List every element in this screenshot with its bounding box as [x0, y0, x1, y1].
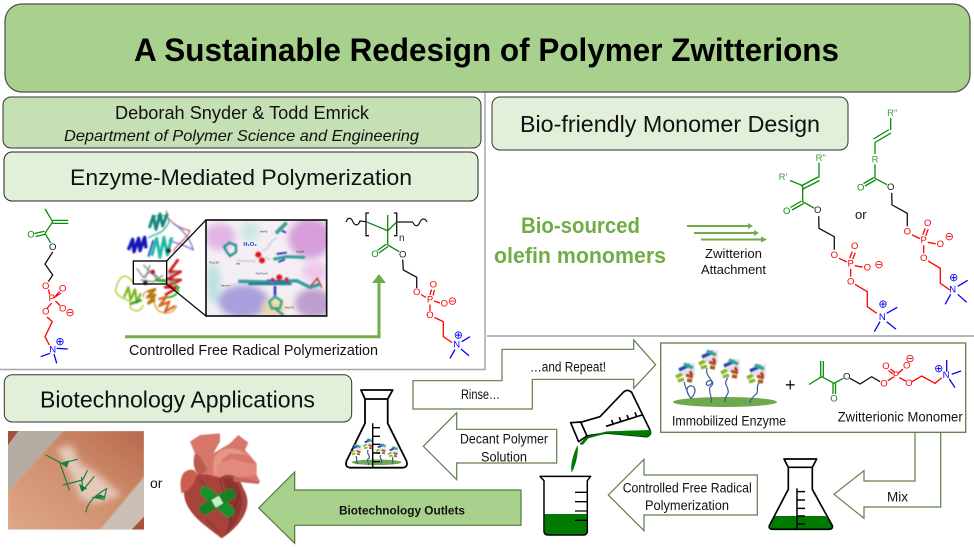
molecule: horizontal zwitterionic monomer: N: [943, 370, 950, 381]
molecule: olefin monomer two: [857, 108, 968, 304]
molecule: olefin monomer one: O: [814, 205, 821, 216]
label: or: or: [150, 475, 163, 491]
molecule: left zwitterionic monomer: [27, 209, 75, 363]
molecule: olefin monomer one: O: [783, 206, 790, 217]
molecule: olefin monomer one: O: [851, 241, 858, 252]
label: Zwitterion Attachment: Zwitterion: [705, 246, 762, 261]
molecule: poly zwitterion: O: [441, 298, 448, 310]
molecule: olefin monomer two: O: [887, 182, 894, 193]
molecule: olefin monomer one: O: [831, 250, 838, 261]
icon: peroxidase enzyme ribbon with inset active site: His42: [260, 229, 268, 233]
molecule: poly zwitterion: O: [430, 280, 437, 290]
icon: peroxidase enzyme ribbon with inset active site: wat: [236, 261, 240, 265]
molecule: poly zwitterion: n: [399, 233, 405, 244]
panel: enzyme plus monomer: [661, 343, 966, 432]
arrow: Rinse and Repeat: Rinse…: [461, 387, 500, 402]
label: Immobilized Enzyme: Immobilized Enzyme: [672, 414, 786, 429]
heading: Bio-sourced olefin monomers: Bio-sourced: [521, 213, 640, 238]
icon: heart with green bandage: [181, 433, 260, 538]
plus sign: +: [785, 375, 796, 395]
molecule: olefin monomer one: [779, 153, 897, 332]
molecule: left zwitterionic monomer: ⊖: [65, 306, 75, 319]
molecule: olefin monomer one: O: [864, 262, 871, 273]
molecule: olefin monomer one: O: [847, 276, 854, 288]
arrow: Controlled Free Radical Polymerization: Polymerization: [645, 498, 729, 513]
molecule: olefin monomer one: R': [779, 172, 788, 183]
icon: beaker with polymer solution: [540, 476, 591, 535]
molecule: olefin monomer two: O: [920, 253, 927, 264]
molecule: poly zwitterion: ⊕: [454, 328, 463, 342]
icon: peroxidase enzyme ribbon with inset active site: His170: [285, 305, 294, 309]
molecule: horizontal zwitterionic monomer: P: [893, 370, 899, 381]
molecule: poly zwitterion: O: [371, 249, 379, 260]
label: or: or: [855, 207, 867, 222]
authors box: Deborah Snyder & Todd Emrick: [115, 103, 370, 123]
arrow: Decant Polymer Solution: Solution: [481, 450, 527, 465]
authors box: Department of Polymer Science and Engineering: [64, 128, 419, 145]
icon: flask with monomer solution: [769, 459, 832, 529]
molecule: olefin monomer one: N: [879, 312, 886, 323]
molecule: poly zwitterion: O: [399, 250, 406, 260]
molecule: olefin monomer one: ⊖: [874, 258, 884, 271]
label: Zwitterionic Monomer: Zwitterionic Monomer: [838, 410, 963, 425]
molecule: olefin monomer one: ⊕: [878, 298, 888, 310]
arrow: Biotechnology Outlets: [259, 472, 521, 543]
molecule: left zwitterionic monomer: ⊕: [55, 335, 65, 348]
heading: Enzyme-Mediated Polymerization: Enzyme-Mediated Polymerization: [70, 165, 412, 190]
molecule: horizontal zwitterionic monomer: O: [905, 378, 913, 389]
icon: peroxidase enzyme ribbon with inset active site: Fe(IV)=O: [256, 272, 269, 276]
molecule: olefin monomer two: O: [857, 182, 864, 194]
molecule: horizontal zwitterionic monomer: O: [882, 361, 890, 372]
heading: Enzyme-Mediated Polymerization: [4, 152, 478, 201]
molecule: poly zwitterion: ⊖: [448, 294, 457, 308]
arrow: Rinse and Repeat: …and Repeat!: [530, 360, 606, 375]
molecule: horizontal zwitterionic monomer: [809, 352, 961, 404]
title banner: [5, 4, 970, 92]
molecule: olefin monomer two: R": [887, 108, 897, 119]
molecule: olefin monomer two: ⊖: [945, 230, 954, 243]
icon: peroxidase enzyme ribbon with inset active site: [115, 211, 332, 318]
title banner: A Sustainable Redesign of Polymer Zwitterions: [134, 32, 839, 68]
icon: peroxidase enzyme ribbon with inset active site: Arg38: [296, 249, 304, 253]
molecule: left zwitterionic monomer: P: [49, 293, 55, 304]
molecule: olefin monomer one: R": [816, 153, 826, 164]
molecule: poly zwitterion: O: [413, 287, 420, 298]
arrow: Decant Polymer Solution: [423, 413, 557, 480]
molecule: poly zwitterion: N: [453, 340, 460, 350]
molecule: left zwitterionic monomer: N: [49, 344, 56, 356]
molecule: olefin monomer two: O: [904, 226, 911, 237]
molecule: poly zwitterion: O: [426, 310, 434, 321]
arrow: Mix: Mix: [887, 490, 908, 505]
molecule: poly zwitterion: [346, 213, 470, 358]
arrow: Rinse and Repeat: [413, 340, 656, 409]
heading: Bio-friendly Monomer Design: [492, 97, 848, 150]
molecule: left zwitterionic monomer: O: [27, 230, 35, 240]
icon: flask with immobilized enzyme: [346, 390, 407, 468]
molecule: left zwitterionic monomer: O: [59, 304, 66, 314]
molecule: olefin monomer two: O: [924, 218, 931, 229]
label: Zwitterion Attachment: Attachment: [701, 262, 766, 277]
heading: Bio-friendly Monomer Design: Bio-friendly Monomer Design: [520, 111, 820, 137]
arrow: Decant Polymer Solution: Decant Polymer: [460, 432, 548, 447]
icon: peroxidase enzyme ribbon with inset active site: H₂O₂: [243, 242, 257, 248]
icon: peroxidase enzyme ribbon with inset active site: Pro139: [209, 260, 219, 264]
molecule: left zwitterionic monomer: O: [42, 306, 49, 318]
arrow: polymerization: [125, 274, 386, 337]
authors box: [3, 97, 481, 148]
molecule: horizontal zwitterionic monomer: ⊕: [934, 362, 943, 375]
molecule: olefin monomer two: P: [921, 235, 927, 246]
icon: immobilized enzyme: [673, 350, 777, 407]
molecule: olefin monomer two: O: [937, 239, 944, 250]
arrow: Biotechnology Outlets: Biotechnology Outlets: [339, 503, 465, 517]
molecule: olefin monomer two: N: [949, 284, 956, 296]
molecule: horizontal zwitterionic monomer: O: [830, 394, 838, 404]
label: Zwitterion Attachment: [701, 246, 766, 277]
label: Controlled Free Radical Polymerization: Controlled Free Radical Polymerization: [129, 343, 378, 359]
molecule: horizontal zwitterionic monomer: O: [903, 360, 910, 372]
heading: Biotechnology Applications: Biotechnology Applications: [40, 387, 315, 413]
arrows: zwitterion attachment: [687, 223, 767, 242]
molecule: left zwitterionic monomer: O: [42, 281, 49, 292]
molecule: left zwitterionic monomer: O: [49, 242, 56, 253]
arrow: Controlled Free Radical Polymerization: [608, 459, 757, 531]
molecule: olefin monomer two: R: [872, 154, 879, 166]
molecule: olefin monomer two: ⊕: [949, 271, 958, 284]
arrow: Controlled Free Radical Polymerization: Controlled Free Radical: [623, 480, 752, 495]
image: sutured finger: [8, 431, 144, 530]
icon: peroxidase enzyme ribbon with inset active site: heme+·: [221, 284, 231, 288]
heading: Bio-sourced olefin monomers: [494, 213, 666, 268]
molecule: horizontal zwitterionic monomer: O: [843, 372, 850, 382]
molecule: left zwitterionic monomer: O: [59, 284, 66, 294]
molecule: horizontal zwitterionic monomer: ⊖: [905, 352, 915, 365]
arrow: Mix: [834, 432, 941, 518]
molecule: olefin monomer one: P: [848, 258, 854, 269]
heading: Biotechnology Applications: [4, 375, 352, 422]
molecule: poly zwitterion: P: [427, 294, 433, 306]
molecule: horizontal zwitterionic monomer: O: [880, 378, 888, 390]
heading: Bio-sourced olefin monomers: olefin monomers: [494, 243, 666, 268]
icon: pouring flask: [571, 390, 651, 473]
